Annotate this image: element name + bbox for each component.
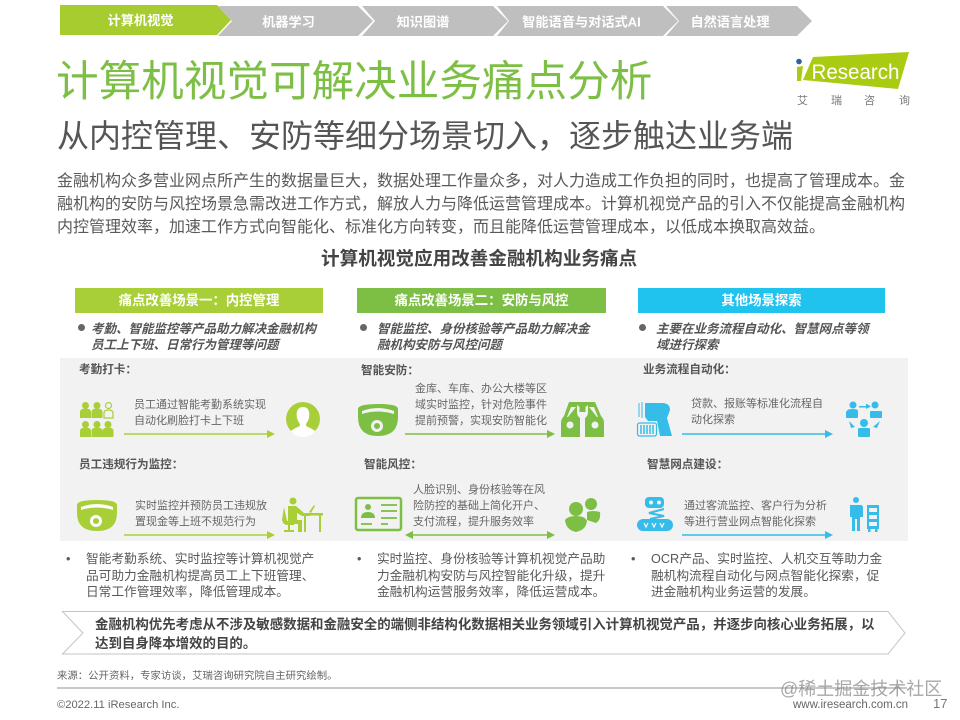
panel: security and risk control bbox=[354, 288, 606, 539]
arrow: violation bbox=[124, 531, 275, 539]
text: attendance description bbox=[134, 398, 266, 427]
logo: iResearch: Research bbox=[812, 61, 900, 84]
bullet: internal control summary: 考勤、智能监控等产品助力解决金融机构 bbox=[91, 322, 316, 336]
arrow: process automation bbox=[682, 430, 833, 438]
icon: dome camera bbox=[358, 404, 398, 436]
subheading: employee violation monitoring: 员工违规行为监控： bbox=[79, 458, 183, 471]
logo: iResearch bbox=[796, 52, 910, 107]
icon: robot bbox=[637, 497, 673, 531]
arrow: smart branch bbox=[682, 531, 833, 539]
nav step: knowledge graph bbox=[362, 6, 508, 36]
text: violation description: 实时监控并预防员工违规放 bbox=[135, 500, 267, 512]
text: risk control description bbox=[413, 484, 545, 528]
gray background band bbox=[60, 358, 908, 541]
text: risk control description: 人脸识别、身份核验等在风 bbox=[413, 484, 545, 496]
nav step: natural language processing: 自然语言处理 bbox=[690, 14, 770, 30]
text: smart security description: 域实时监控，针对危险事件 bbox=[415, 399, 547, 411]
panel header: internal control bbox=[75, 288, 323, 313]
nav step: knowledge graph: 知识图谱 bbox=[397, 14, 449, 30]
subtitle: 从内控管理、安防等细分场景切入，逐步触达业务端 bbox=[57, 118, 793, 154]
section heading: 计算机视觉应用改善金融机构业务痛点 bbox=[321, 248, 637, 269]
bullet: security summary: 融机构安防与风控问题 bbox=[377, 338, 502, 352]
navigation breadcrumb bbox=[60, 5, 812, 36]
bullet: security summary bbox=[360, 322, 591, 352]
bullet: other scenarios summary: 域进行探索 bbox=[656, 338, 719, 352]
intro paragraph bbox=[57, 172, 905, 236]
text: attendance description: 自动化刷脸打卡上下班 bbox=[134, 415, 244, 427]
bullet: internal control summary: 员工上下班、日常行为管理等问题 bbox=[91, 338, 279, 352]
page number: 17 bbox=[933, 696, 947, 711]
subheading: smart risk control: 智能风控： bbox=[364, 458, 422, 471]
icon: collaboration network bbox=[846, 402, 882, 437]
icon: user avatar bbox=[286, 402, 320, 437]
icon: customers bbox=[565, 498, 600, 532]
panel header: other scenarios bbox=[638, 288, 885, 313]
text: smart security description: 提前预警，实现安防智能化 bbox=[415, 415, 547, 427]
subheading: attendance: 考勤打卡： bbox=[79, 363, 137, 376]
footer copyright: ©2022.11 iResearch Inc. bbox=[57, 699, 179, 711]
icon: car with wrench bbox=[561, 402, 604, 437]
nav step: speech and conversational AI: 智能语音与对话式AI bbox=[522, 14, 641, 30]
callout text bbox=[95, 617, 874, 651]
conclusion: internal control bbox=[66, 552, 314, 599]
conclusion: security: 实时监控、身份核验等计算机视觉产品助 bbox=[377, 552, 605, 566]
intro paragraph: 内控管理效率，加速工作方式向智能化、标准化方向转变，而且能降低运营管理成本，以低成本换取高效益。 bbox=[57, 219, 825, 236]
bullet: internal control summary bbox=[78, 322, 318, 352]
conclusion: security: 力金融机构安防与风控智能化升级，提升 bbox=[377, 568, 605, 582]
footer website: www.iresearch.com.cn bbox=[793, 699, 908, 711]
text: attendance description: 员工通过智能考勤系统实现 bbox=[134, 399, 266, 411]
panel header: other scenarios: 其他场景探索 bbox=[721, 293, 802, 308]
panel: internal control bbox=[75, 288, 323, 539]
text: smart branch description bbox=[684, 500, 827, 528]
nav step: computer vision (active): 计算机视觉 bbox=[108, 12, 173, 28]
text: smart branch description: 通过客流监控、客户行为分析 bbox=[684, 500, 827, 512]
logo: iResearch: 咨 bbox=[864, 93, 875, 107]
text: smart security description: 金库、车库、办公大楼等区 bbox=[415, 383, 547, 395]
icon: barcode scanner bbox=[636, 402, 672, 437]
nav step: computer vision (active) bbox=[60, 5, 231, 35]
text: process automation description bbox=[691, 398, 823, 426]
icon: dome camera bbox=[77, 500, 117, 531]
callout: key takeaway bbox=[62, 611, 906, 654]
logo: iResearch: 询 bbox=[899, 94, 910, 107]
text: violation description: 置现金等上班不规范行为 bbox=[135, 516, 256, 528]
text: risk control description: 险防控的基础上简化开户、 bbox=[413, 500, 545, 512]
source note: 来源：公开资料，专家访谈，艾瑞咨询研究院自主研究绘制。 bbox=[57, 671, 338, 682]
subheading: process automation: 业务流程自动化： bbox=[643, 363, 736, 376]
conclusion: other scenarios: 进金融机构业务运营的发展。 bbox=[651, 585, 816, 599]
icon: staff with filing cabinet bbox=[850, 497, 879, 532]
text: violation description bbox=[135, 500, 267, 528]
logo: iResearch: 瑞 bbox=[831, 93, 842, 107]
nav step: machine learning bbox=[218, 6, 373, 36]
bullet: other scenarios summary bbox=[639, 322, 870, 352]
text: risk control description: 支付流程，提升服务效率 bbox=[413, 516, 534, 528]
bullet: other scenarios summary: 主要在业务流程自动化、智慧网点等领 bbox=[656, 322, 869, 336]
arrow: attendance bbox=[124, 430, 275, 438]
nav step: speech and conversational AI bbox=[497, 6, 678, 36]
arrow: smart security bbox=[405, 430, 555, 438]
panel: other scenarios bbox=[636, 288, 885, 539]
callout text: 达到自身降本增效的目的。 bbox=[95, 636, 256, 651]
intro paragraph: 融机构的安防与风控场景急需改进工作方式，解放人力与降低运营管理成本。计算机视觉产品的引入不仅能提高金融机构 bbox=[57, 196, 905, 213]
panel header: internal control: 痛点改善场景一：内控管理 bbox=[119, 293, 279, 308]
subheading: smart security: 智能安防： bbox=[361, 364, 419, 377]
text: smart security description bbox=[415, 382, 547, 427]
footer rule bbox=[57, 687, 907, 689]
conclusion: other scenarios bbox=[631, 552, 882, 599]
panel header: security: 痛点改善场景二：安防与风控 bbox=[394, 293, 569, 308]
intro paragraph: 金融机构众多营业网点所产生的数据量巨大，数据处理工作量众多，对人力造成工作负担的同时，也提高了管理成本。金 bbox=[57, 173, 905, 190]
arrow: risk control (double-headed) bbox=[405, 531, 555, 539]
nav step: natural language processing bbox=[666, 6, 812, 36]
conclusion: internal control: • bbox=[66, 552, 70, 566]
bullet: security summary: 智能监控、身份核验等产品助力解决金 bbox=[377, 322, 590, 336]
conclusion: internal control: 品可助力金融机构提高员工上下班管理、 bbox=[86, 568, 314, 582]
subheading: smart branch: 智慧网点建设： bbox=[647, 458, 728, 471]
conclusion: other scenarios: 融机构流程自动化与网点智能化探索，促 bbox=[651, 568, 879, 582]
watermark: @稀土掘金技术社区 bbox=[780, 679, 942, 699]
conclusion: internal control: 智能考勤系统、实时监控等计算机视觉产 bbox=[86, 552, 314, 566]
title: 计算机视觉可解决业务痛点分析 bbox=[56, 58, 652, 106]
conclusion: security: • bbox=[357, 552, 361, 566]
conclusion: security bbox=[357, 552, 605, 599]
panel header: security bbox=[357, 288, 606, 313]
icon: employee group bbox=[80, 402, 114, 437]
text: smart branch description: 等进行营业网点智能化探索 bbox=[684, 516, 816, 528]
text: process automation description: 贷款、报账等标准化流程自 bbox=[691, 398, 823, 410]
conclusion: security: 金融机构运营服务效率，降低运营成本。 bbox=[377, 585, 605, 599]
text: process automation description: 动化探索 bbox=[691, 414, 735, 426]
callout text: 金融机构优先考虑从不涉及敏感数据和金融安全的端侧非结构化数据相关业务领域引入计算机视觉产品，并逐步向核心业务拓展，以 bbox=[95, 617, 874, 632]
conclusion: other scenarios: • bbox=[631, 552, 635, 566]
icon: worker at desk bbox=[282, 498, 323, 532]
logo: iResearch: 艾 bbox=[797, 94, 808, 107]
nav step: machine learning: 机器学习 bbox=[262, 14, 315, 30]
conclusion: internal control: 日常工作管理效率，降低管理成本。 bbox=[86, 585, 289, 599]
conclusion: other scenarios: OCR产品、实时监控、人机交互等助力金 bbox=[651, 552, 882, 566]
icon: ID card bbox=[354, 496, 402, 532]
